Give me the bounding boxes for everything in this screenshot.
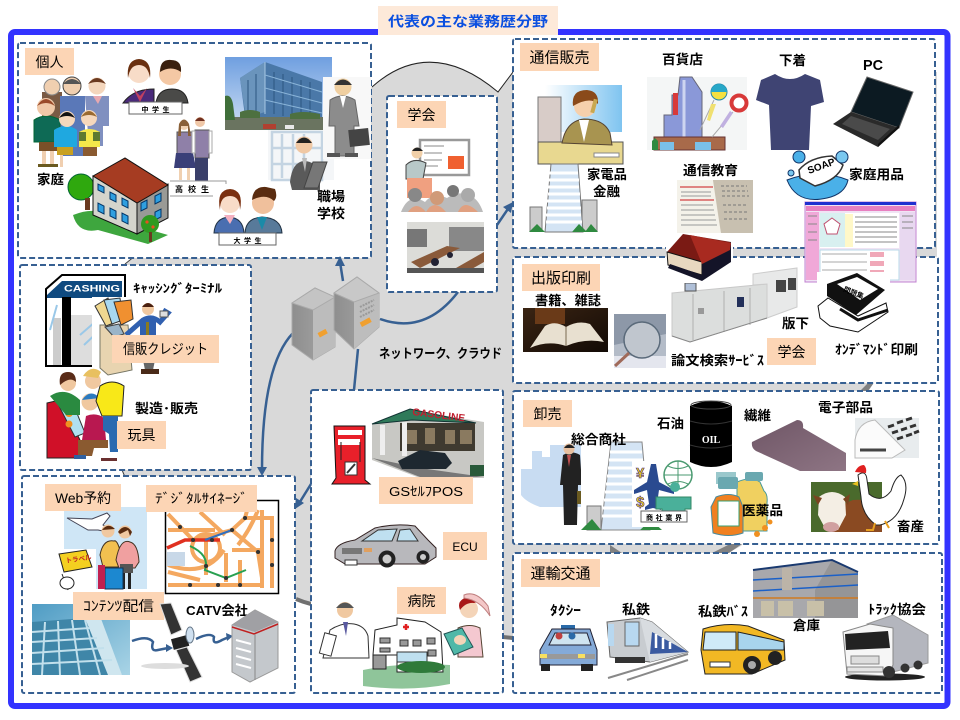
label: 通信販売 (520, 43, 599, 71)
label: 卸売 (523, 400, 572, 427)
panel: 個人 (18, 43, 371, 258)
photo: office tower (32, 604, 130, 675)
photo: office building (225, 57, 332, 130)
label: デジタルサイネージ (146, 485, 257, 512)
text: 論文検索サービス: 論文検索ｻｰﾋﾞｽ (671, 353, 765, 368)
text: CATV会社: CATV会社 (186, 603, 248, 618)
label: ECU: ECU (452, 540, 478, 554)
icon: skyscraper (581, 442, 673, 530)
photo: gas station (372, 407, 484, 478)
text: 書籍、雑誌: 書籍、雑誌 (535, 293, 601, 308)
text: 家電品 金融: 家電品 (587, 167, 627, 182)
photo: textbook (677, 180, 753, 233)
icon: department store (647, 77, 747, 150)
icon: family (34, 77, 109, 167)
text: 家電品 金融: 金融 (593, 184, 620, 199)
text: 私鉄バス: 私鉄ﾊﾞｽ (698, 604, 749, 619)
icon: satellite and signal (132, 603, 233, 682)
text: 下着: 下着 (779, 53, 806, 68)
label: 病院: 病院 (408, 593, 436, 609)
label: 学会: 学会 (408, 107, 436, 123)
arrowheads (257, 202, 513, 509)
icon: soap: SOAP (806, 157, 837, 177)
label: 個人: 個人 (36, 54, 64, 70)
chart: subway map (166, 500, 278, 594)
label: 病院 (397, 587, 446, 614)
text: 家庭用品: 家庭用品 (849, 167, 904, 182)
text: ネットワーク、クラウド: ネットワーク、クラウド (379, 346, 502, 361)
photo: magnifier (614, 314, 666, 368)
text: 製造・販売: 製造･販売 (135, 401, 198, 416)
text: タクシー: ﾀｸｼｰ (550, 603, 581, 618)
icon: oil barrel (690, 401, 732, 467)
icon: nurse (444, 594, 490, 657)
icon: medicine bottles (709, 468, 777, 537)
icon: trading industry: 商社業界 (646, 513, 682, 522)
icon: arcade game and kids (47, 369, 124, 461)
label: 出版印刷 (522, 264, 600, 291)
panel: 卸売 (513, 391, 939, 544)
icon: CATV building (232, 610, 278, 682)
icon: t-shirt (756, 74, 824, 150)
label: 信販クレジット (112, 335, 219, 363)
text: PC: PC (863, 57, 883, 74)
text: 総合商社: 総合商社 (571, 432, 626, 447)
label: 玩具: 玩具 (128, 427, 156, 443)
panel: GS / ECU / 病院 (311, 390, 503, 693)
icon: truck (843, 615, 928, 680)
icon: fabric roll (752, 420, 846, 471)
panel: 学会 (387, 96, 497, 292)
icon: laptop (833, 77, 913, 147)
icon: junior high students: 中学生 (142, 105, 170, 114)
network cloud background (122, 62, 937, 641)
photo: cow (811, 482, 882, 532)
icon: train (607, 618, 688, 680)
text: 私鉄: 私鉄 (622, 602, 650, 617)
text: 畜産: 畜産 (897, 519, 924, 534)
label: GSセルフPOS (379, 477, 473, 504)
icon: travellers (64, 507, 147, 589)
icon: trading industry (632, 461, 693, 527)
title: 代表の主な業務歴分野 (388, 14, 548, 30)
icon: travel flag: トラベル (65, 553, 93, 565)
text: 家電品 金融 (587, 167, 627, 199)
text: 版下: 版下 (782, 316, 809, 331)
icon: chicken (852, 465, 906, 530)
text: 職場 学校: 職場 (317, 189, 345, 204)
text: オンデマンド印刷: ｵﾝﾃﾞﾏﾝﾄﾞ印刷 (835, 342, 918, 357)
icon: doctor (319, 602, 369, 658)
panel: 出版印刷 (513, 257, 938, 383)
label: デジタルサイネージ: ﾃﾞｼﾞﾀﾙｻｲﾈｰｼﾞ (155, 491, 248, 506)
icon: school and man with laptop (268, 130, 334, 190)
icon: university students (214, 187, 282, 245)
text: 百貨店: 百貨店 (662, 52, 703, 67)
label: 通信販売: 通信販売 (529, 50, 590, 66)
label: ECU (443, 532, 487, 560)
panel: Web予約 / デジタルサイネージ / コンテンツ配信 (22, 476, 295, 693)
icon: warehouse (753, 560, 858, 618)
icon: high school students: 高校生 (175, 184, 209, 194)
text: 家庭: 家庭 (37, 172, 64, 187)
text: 医薬品: 医薬品 (742, 503, 783, 518)
icon: problem-book stack: 問題集 (842, 285, 865, 301)
label: コンテンツ配信 (73, 592, 164, 620)
text: 職場 学校 (317, 189, 345, 221)
photo: open book (523, 308, 608, 352)
icon: woman on telephone (538, 85, 623, 164)
label: 運輸交通: 運輸交通 (530, 566, 591, 582)
icon: cashing booth: CASHING (64, 284, 120, 294)
icon: red books (666, 233, 733, 283)
icon: trading industry: ¥ (636, 465, 645, 482)
icon: businessman and city (521, 444, 582, 525)
icon: presentation (401, 140, 483, 212)
label: 玩具 (117, 421, 166, 449)
label: 学会: 学会 (778, 344, 806, 360)
icon: servers (292, 277, 379, 360)
icon: house (68, 158, 168, 244)
icon: businessman with briefcase (323, 77, 371, 159)
text: キャッシングターミナル: ｷｬｯｼﾝｸﾞﾀｰﾐﾅﾙ (133, 280, 222, 296)
text: 倉庫: 倉庫 (793, 618, 820, 633)
label: 学会 (397, 101, 446, 128)
icon: problem-book stack (817, 272, 890, 332)
label: 出版印刷: 出版印刷 (531, 270, 591, 287)
panel: 通信販売 (513, 39, 935, 283)
icon: travel flag (54, 549, 96, 590)
icon: car (335, 525, 436, 568)
panel: 信販クレジット (20, 265, 251, 470)
text: 職場 学校: 学校 (317, 206, 345, 221)
screenshot: web application (805, 202, 916, 282)
label: 個人 (25, 48, 74, 75)
text: 繊維: 繊維 (744, 408, 771, 423)
icon: soap (787, 151, 848, 200)
label: 運輸交通 (521, 559, 600, 587)
label: 信販クレジット: 信販クレジット (123, 341, 208, 357)
icon: oil barrel: OIL (702, 435, 720, 446)
text: 石油: 石油 (657, 416, 684, 431)
panel: 運輸交通 (513, 553, 942, 693)
icon: skyscraper (529, 164, 598, 232)
icon: junior high students (123, 59, 188, 114)
text: 通信教育: 通信教育 (683, 163, 738, 178)
photo: gas station: GASOLINE (412, 407, 466, 424)
photo: seminar room (407, 222, 484, 273)
icon: trading industry: $ (636, 494, 645, 511)
icon: hospital (363, 618, 450, 689)
label: 学会 (767, 338, 816, 365)
title (378, 6, 558, 35)
label: コンテンツ配信: ｺﾝﾃﾝﾂ配信 (83, 598, 154, 614)
text: トラック協会: ﾄﾗｯｸ協会 (868, 602, 926, 617)
icon: taxi (540, 625, 597, 671)
icon: fuel pump (332, 426, 370, 484)
photo: telephone (855, 418, 919, 458)
icon: university students: 大学生 (234, 236, 262, 245)
icon: cashing booth (46, 275, 125, 366)
label: Web予約: Web予約 (55, 490, 111, 506)
text: 電子部品: 電子部品 (818, 400, 873, 415)
icon: card terminal and man (92, 297, 170, 375)
label: 卸売: 卸売 (534, 406, 562, 422)
icon: bus (701, 625, 785, 674)
label: Web予約 (45, 484, 121, 511)
icon: high school students (170, 117, 226, 196)
arrows: network links (262, 206, 510, 505)
icon: printing machine (666, 268, 800, 343)
label: GSセルフPOS: GSｾﾙﾌPOS (389, 484, 463, 499)
